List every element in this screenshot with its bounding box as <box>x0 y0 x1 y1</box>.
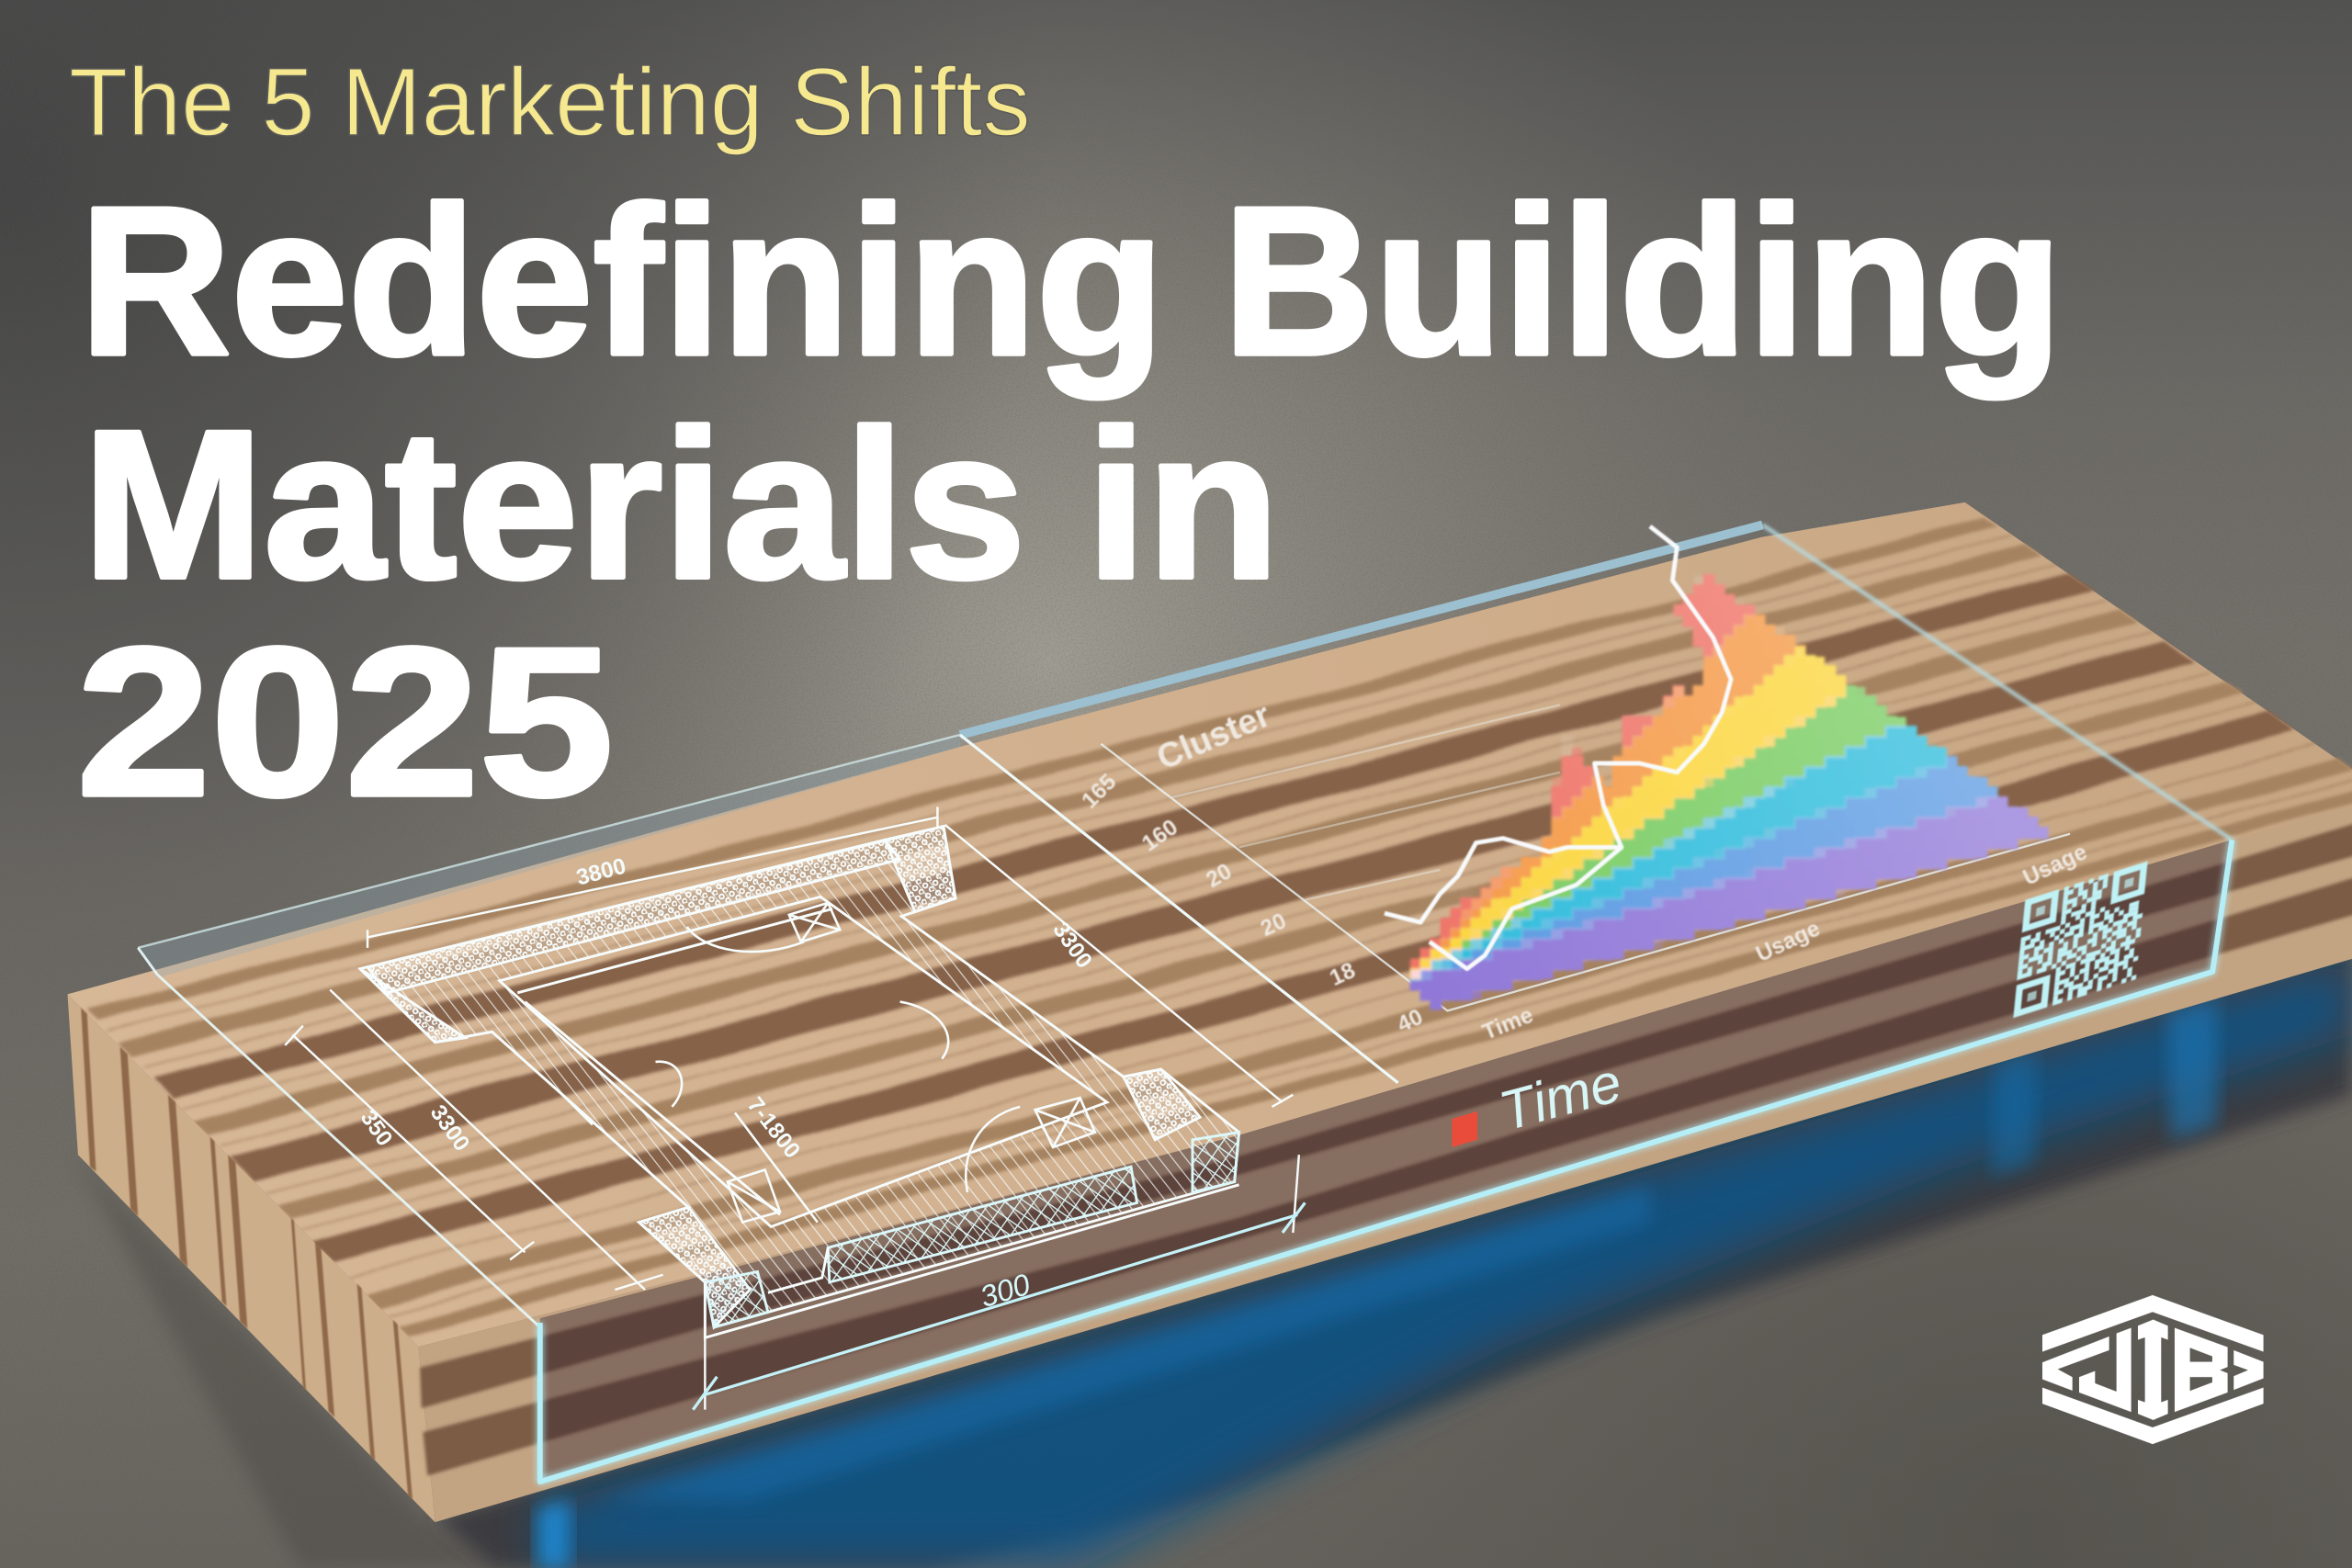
logo letter B <box>2175 1328 2228 1412</box>
dimension labels: 3300 <box>425 1100 474 1156</box>
time legend <box>1452 1050 1628 1147</box>
chart labels <box>1077 694 2091 1045</box>
logo bottom chevron <box>2042 1388 2264 1444</box>
dimension lines <box>285 807 1305 1410</box>
wood end face <box>67 994 435 1522</box>
dimension labels: 7-1800 <box>742 1093 805 1163</box>
chart labels: Time <box>1479 1003 1537 1045</box>
red marker <box>1452 1111 1477 1147</box>
dimension labels: 3800 <box>574 853 628 891</box>
chart labels: Usage <box>1752 916 1824 967</box>
chart labels: Cluster <box>1151 694 1276 777</box>
title: Materials in <box>83 387 1280 623</box>
walls <box>360 827 1239 1337</box>
dimension labels: 350 <box>356 1106 397 1151</box>
QR code <box>2013 863 2148 1016</box>
chart labels: Usage <box>2019 840 2091 891</box>
dimension labels <box>356 853 1097 1314</box>
axes and grid <box>1101 705 2070 1010</box>
chart labels: 20 <box>1257 908 1290 942</box>
dimension labels: 3300 <box>1047 918 1097 973</box>
icon: JIB logo <box>2042 1295 2264 1444</box>
subtitle: The 5 Marketing Shifts <box>69 49 1031 156</box>
title: 2025 <box>76 604 614 840</box>
holographic glass frame <box>138 525 2232 1482</box>
logo letter I <box>2138 1320 2168 1420</box>
title: Redefining Building <box>80 163 2063 399</box>
title <box>76 163 2063 840</box>
chart labels: 20 <box>1202 859 1236 893</box>
chart labels: 18 <box>1326 958 1359 991</box>
wooden block <box>67 502 2352 1522</box>
blueprint floor plan <box>285 807 1305 1410</box>
logo top chevron <box>2042 1295 2264 1352</box>
rainbow usage chart <box>1077 526 2091 1045</box>
white trend lines <box>1385 526 1731 969</box>
door arcs and fixtures <box>562 903 1095 1223</box>
dimension labels: 300 <box>976 1267 1034 1314</box>
chart labels: 40 <box>1394 1005 1427 1038</box>
wood top face <box>67 502 2352 1347</box>
logo letter J <box>2079 1328 2132 1412</box>
chart labels: 165 <box>1077 770 1121 814</box>
logo right bracket <box>2233 1350 2264 1390</box>
legend label: Time <box>1493 1050 1628 1143</box>
wood front face <box>419 792 2352 1522</box>
logo left bracket <box>2042 1337 2109 1391</box>
chart labels: 160 <box>1137 815 1182 857</box>
shadow and blue glow under block <box>75 945 2352 1568</box>
rainbow density area <box>1408 573 2051 1012</box>
